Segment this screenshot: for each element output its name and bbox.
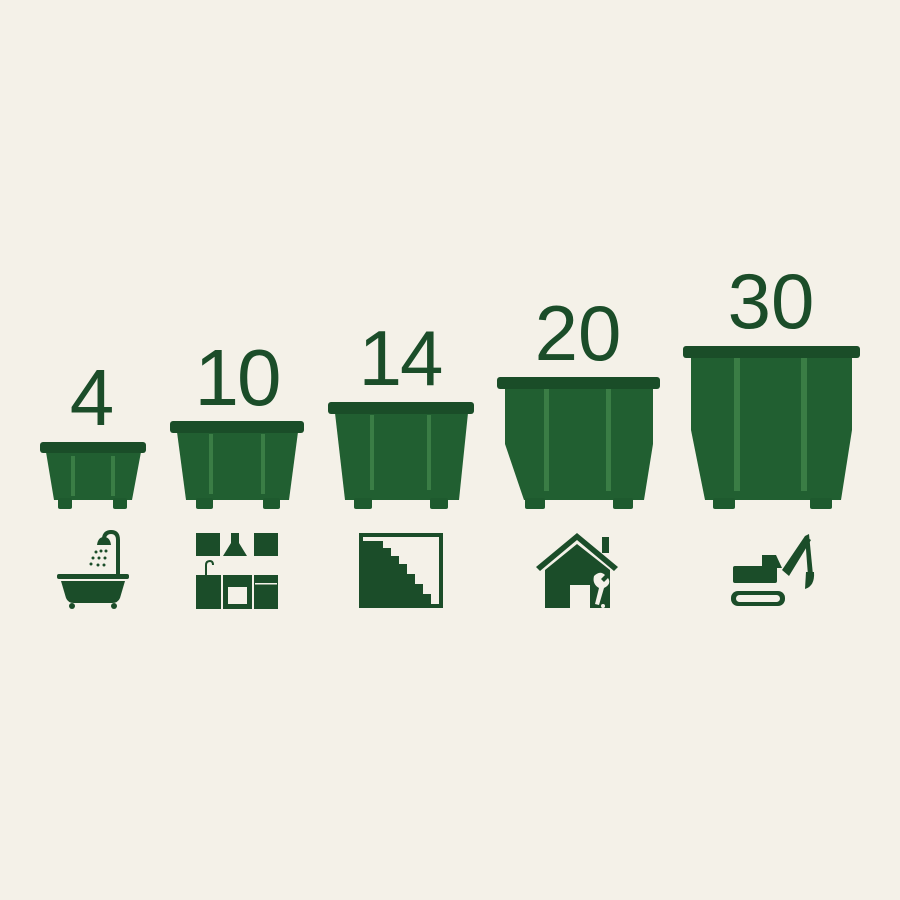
bin: 20 yard	[497, 289, 660, 509]
bin: 14 yard	[328, 314, 474, 509]
icon: house with tools	[536, 533, 618, 608]
number 10: 10	[195, 333, 279, 422]
icon: kitchen	[196, 533, 278, 609]
number 4: 4	[70, 353, 114, 442]
bin: 4 yard	[40, 353, 146, 509]
number 20: 20	[535, 289, 621, 377]
bin: 10 yard	[170, 333, 304, 509]
icon: stairs	[359, 533, 443, 608]
bin: 30 yard	[683, 257, 860, 509]
number 14: 14	[359, 314, 442, 402]
icon: excavator	[731, 534, 814, 606]
icon: bathtub	[57, 532, 129, 609]
number 30: 30	[728, 257, 814, 345]
